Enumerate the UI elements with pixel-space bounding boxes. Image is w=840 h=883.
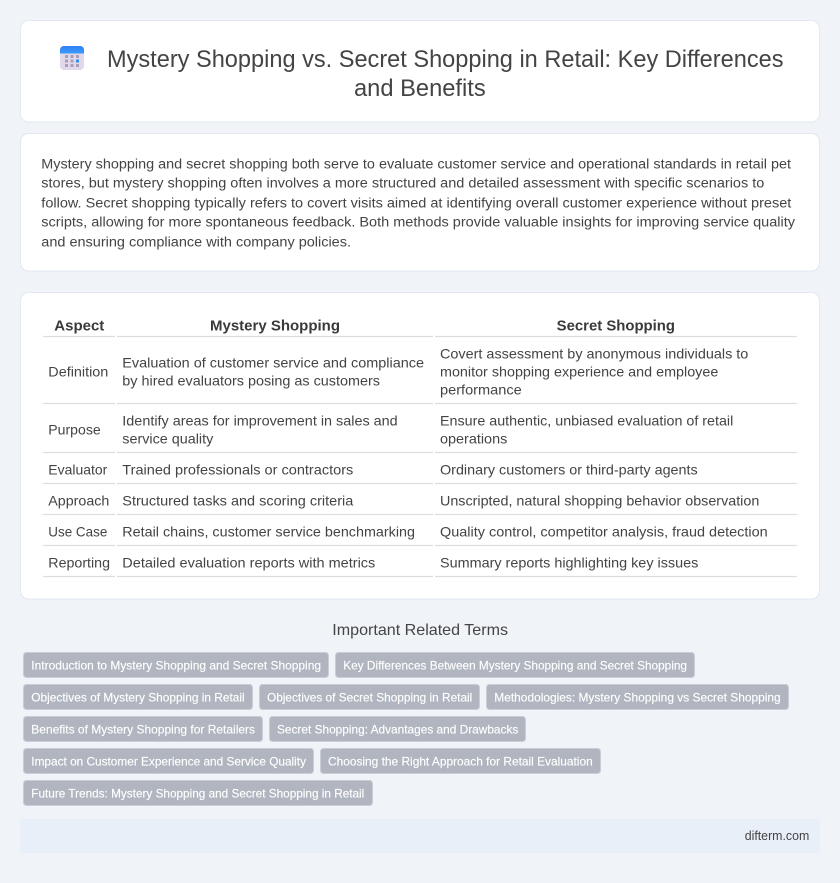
- table row: definition: performance: [440, 381, 522, 397]
- table row: purpose: Identify areas for improvement in sales and: [122, 412, 398, 428]
- table row: purpose: Purpose: [48, 421, 101, 437]
- table row: use case: Quality control, competitor analysis, fraud detection: [440, 523, 768, 539]
- table row: definition: Definition: [48, 364, 108, 380]
- tag: methodologies: Methodologies: Mystery Shopping vs Secret Shopping: [494, 690, 781, 704]
- tag: key differences: Key Differences Between Mystery Shopping and Secret Shopping: [343, 658, 687, 672]
- table header row: Secret Shopping: [557, 319, 675, 335]
- table row: purpose: operations: [440, 430, 507, 446]
- tag: advantages and drawbacks: [270, 716, 526, 742]
- tag: objectives of mystery shopping: [24, 684, 252, 710]
- table row: evaluator: Evaluator: [48, 461, 108, 477]
- text block: intro paragraph: follow. Secret shopping typically refers to covert visits aimed at identifying overall customer experience without preset: [41, 195, 791, 211]
- table row: evaluator: Ordinary customers or third-party agents: [440, 461, 698, 477]
- table row: definition: Evaluation of customer service and compliance: [122, 354, 424, 370]
- text block: intro paragraph: Mystery shopping and secret shopping both serve to evaluate customer service and operational standards in retail pet: [41, 156, 791, 172]
- table row: definition: [43, 345, 797, 404]
- table header row: [43, 319, 797, 336]
- table row: definition: by hired evaluators posing as customers: [122, 372, 380, 388]
- table header row: Aspect: [54, 319, 105, 335]
- panel: comparison table: [20, 292, 820, 599]
- table row: definition: Covert assessment by anonymous individuals to: [440, 345, 749, 361]
- title: [107, 46, 784, 102]
- title: and Benefits: [354, 75, 486, 102]
- tag: impact: [24, 748, 314, 774]
- table row: evaluator: [43, 461, 797, 484]
- table row: use case: Use Case: [48, 523, 108, 539]
- table row: use case: [43, 523, 797, 546]
- tag: future trends: Future Trends: Mystery Shopping and Secret Shopping in Retail: [31, 786, 364, 800]
- table row: reporting: Reporting: [48, 554, 110, 570]
- table row: reporting: [43, 554, 797, 576]
- tag: introduction: [24, 652, 328, 678]
- tag: advantages and drawbacks: Secret Shopping: Advantages and Drawbacks: [277, 722, 518, 736]
- text block: intro paragraph: [41, 156, 796, 250]
- tag: key differences: [336, 652, 694, 678]
- table row: evaluator: Trained professionals or contractors: [122, 461, 353, 477]
- table row: approach: Approach: [48, 492, 109, 508]
- text block: intro paragraph: and ensuring compliance with company policies.: [41, 234, 351, 250]
- heading: important related terms: Important Related Terms: [332, 622, 508, 639]
- title: Mystery Shopping vs. Secret Shopping in Retail: Key Differences: [107, 46, 784, 73]
- text block: intro paragraph: scripts, allowing for more spontaneous feedback. Both methods provide valuable insights for improving service quality: [41, 215, 796, 231]
- footer: [20, 819, 820, 853]
- panel: header: [20, 20, 820, 122]
- tag: benefits: [24, 716, 262, 742]
- tag: introduction: Introduction to Mystery Shopping and Secret Shopping: [31, 658, 321, 672]
- table row: use case: Retail chains, customer service benchmarking: [122, 523, 415, 539]
- panel: introduction: [20, 134, 820, 271]
- tag: methodologies: [486, 684, 788, 710]
- panel: related term tags: [24, 652, 788, 806]
- table row: purpose: [43, 412, 797, 452]
- table row: approach: [43, 492, 797, 514]
- tag: choosing approach: [320, 748, 600, 774]
- tag: objectives of secret shopping: [260, 684, 480, 710]
- table row: approach: Structured tasks and scoring criteria: [122, 492, 354, 508]
- table row: purpose: Ensure authentic, unbiased evaluation of retail: [440, 412, 733, 428]
- tag: future trends: [24, 780, 372, 806]
- table header row: Mystery Shopping: [210, 319, 340, 335]
- table row: reporting: Detailed evaluation reports with metrics: [122, 554, 375, 570]
- table row: approach: Unscripted, natural shopping behavior observation: [440, 492, 759, 508]
- tag: choosing approach: Choosing the Right Approach for Retail Evaluation: [328, 754, 593, 768]
- table row: definition: monitor shopping experience and employee: [440, 363, 719, 379]
- table row: purpose: service quality: [122, 430, 213, 446]
- tag: objectives of secret shopping: Objectives of Secret Shopping in Retail: [267, 690, 472, 704]
- icon: calendar: [60, 46, 84, 70]
- tag: benefits: Benefits of Mystery Shopping for Retailers: [31, 722, 255, 736]
- footer: difterm.com: [745, 828, 809, 843]
- table row: reporting: Summary reports highlighting key issues: [440, 554, 698, 570]
- text block: intro paragraph: stores, but mystery shopping often involves a more structured and detailed assessment with specific scenarios to: [41, 176, 764, 192]
- tag: impact: Impact on Customer Experience and Service Quality: [31, 754, 306, 768]
- tag: objectives of mystery shopping: Objectives of Mystery Shopping in Retail: [31, 690, 245, 704]
